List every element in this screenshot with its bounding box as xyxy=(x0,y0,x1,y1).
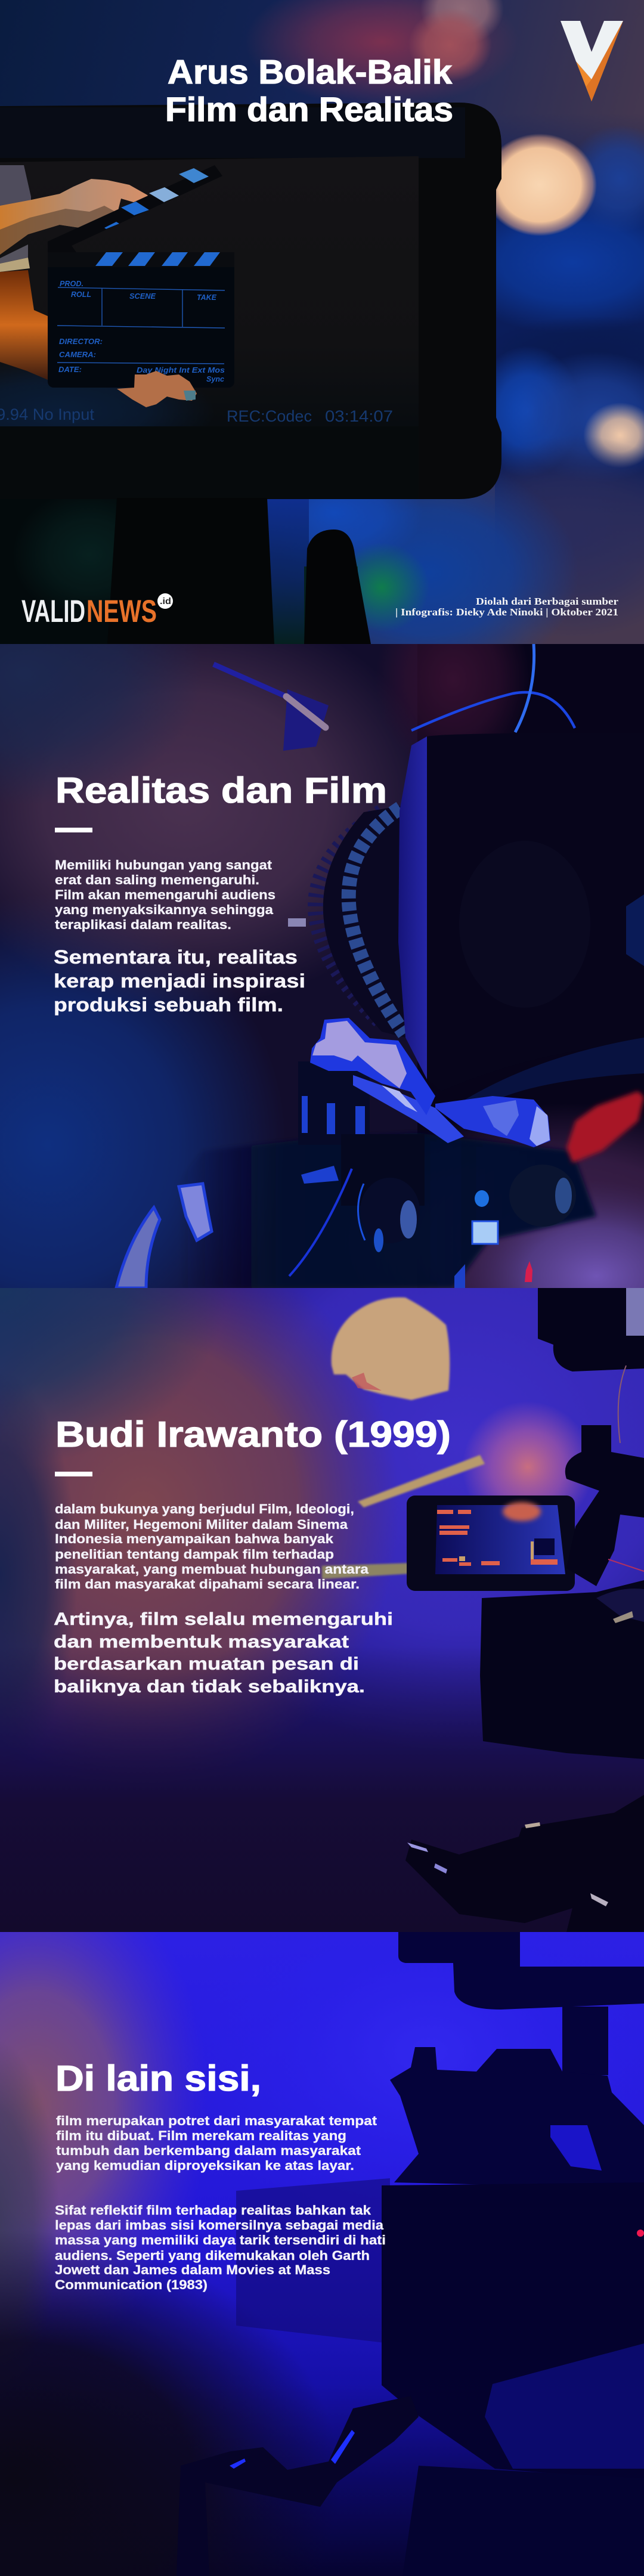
clapper board face: TAKE xyxy=(197,293,216,302)
lens ring xyxy=(288,805,405,1038)
body text: erat dan saling memengaruhi. xyxy=(55,872,259,887)
body text: dalam bukunya yang berjudul Film, Ideologi, xyxy=(55,1501,354,1516)
heading: Budi Irawanto: Budi Irawanto (1999) xyxy=(55,1414,451,1454)
camera monitor frame xyxy=(0,103,501,499)
bright moon bokeh xyxy=(332,1298,450,1400)
emphasis text: kerap menjadi inspirasi xyxy=(54,970,305,992)
body text: second paragraph: Sifat reflektif film terhadap realitas bahkan tak xyxy=(55,2203,371,2218)
camera rails and knobs xyxy=(116,1061,596,1288)
body text: penelitian tentang dampak film terhadap xyxy=(55,1547,334,1562)
lens silhouette xyxy=(236,2178,390,2343)
logo: VALIDNEWS.id: NEWS xyxy=(86,594,157,629)
panel 4 background glow xyxy=(0,1854,644,2576)
emphasis text: baliknya dan tidak sebaliknya. xyxy=(54,1677,365,1696)
monitor readout text xyxy=(0,408,392,423)
fingers under the board xyxy=(117,371,197,407)
body text: first paragraph xyxy=(56,2113,377,2173)
clapper board face: Sync xyxy=(206,374,225,383)
body text: masyarakat, yang membuat hubungan antara xyxy=(55,1562,369,1577)
body text: Memiliki hubungan yang sangat xyxy=(55,857,273,872)
body text: second paragraph: Jowett dan James dalam Movies at Mass xyxy=(55,2262,330,2277)
clapper board face: ROLL xyxy=(71,290,91,299)
monitor readout text: REC:Codec xyxy=(227,407,312,425)
body text: second paragraph xyxy=(55,2203,386,2292)
logo: VALIDNEWS.id: VALID xyxy=(21,594,85,629)
emphasis text: produksi sebuah film. xyxy=(54,994,283,1015)
person arm and torso xyxy=(0,165,152,380)
clapper board face xyxy=(48,252,234,388)
clapper board face: SCENE xyxy=(129,292,156,301)
logo: VALIDNEWS.id: .id xyxy=(160,596,171,606)
body text: first paragraph: film merupakan potret dari masyarakat tempat xyxy=(56,2113,377,2128)
heading underline xyxy=(55,1472,92,1476)
emphasis text: dan membentuk masyarakat xyxy=(54,1632,349,1652)
body text: Film akan memengaruhi audiens xyxy=(55,887,275,902)
emphasis text xyxy=(54,1609,393,1696)
title: Arus Bolak-Balik xyxy=(168,53,452,91)
clapper board face: DATE: xyxy=(58,365,82,374)
icon: Validnews V logo xyxy=(561,21,623,101)
clapper board face: PROD. xyxy=(60,279,83,288)
panel 3 background glow xyxy=(0,1109,644,1932)
rig silhouette xyxy=(405,1795,644,1932)
body text: second paragraph: audiens. Seperti yang dikemukakan oleh Garth xyxy=(55,2248,370,2263)
panel 2 background glow xyxy=(0,644,644,1288)
camera body and lens xyxy=(398,733,644,1103)
body text xyxy=(55,1501,369,1592)
title: Film dan Realitas xyxy=(165,91,453,129)
camera silhouette xyxy=(480,1288,644,1759)
operator hand xyxy=(310,1018,550,1147)
emphasis text: berdasarkan muatan pesan di xyxy=(54,1654,359,1674)
body text: first paragraph: yang kemudian diproyeksikan ke atas layar. xyxy=(56,2158,354,2173)
body text: first paragraph: tumbuh dan berkembang dalam masyarakat xyxy=(56,2143,361,2158)
credits: | Infografis: Dieky Ade Ninoki | Oktober 2021 xyxy=(395,606,618,618)
camera silhouette xyxy=(177,1932,644,2576)
heading: Di lain sisi: Di lain sisi, xyxy=(55,2058,261,2098)
light streaks xyxy=(322,1455,485,1579)
body text: second paragraph: lepas dari imbas sisi komersilnya sebagai media xyxy=(55,2218,384,2233)
body text: second paragraph: massa yang memiliki daya tarik tersendiri di hati xyxy=(55,2233,386,2247)
body text: second paragraph: Communication (1983) xyxy=(55,2277,208,2292)
credits: Diolah dari Berbagai sumber xyxy=(476,596,618,607)
body text xyxy=(55,857,275,932)
body text: dan Militer, Hegemoni Militer dalam Sinema xyxy=(55,1517,348,1532)
panel: Di lain sisi xyxy=(0,1854,644,2576)
title xyxy=(167,58,453,122)
panel: Budi Irawanto xyxy=(0,1109,644,1932)
body text: first paragraph: film itu dibuat. Film merekam realitas yang xyxy=(56,2128,346,2143)
clapper board face: CAMERA: xyxy=(59,350,96,359)
heading underline xyxy=(55,828,92,832)
emphasis text: Artinya, film selalu memengaruhi xyxy=(54,1609,393,1629)
clapper board face: DIRECTOR: xyxy=(59,337,103,346)
heading: Realitas dan Film: Realitas dan Film xyxy=(55,770,387,810)
cover background bokeh xyxy=(0,0,644,686)
panel: cover xyxy=(0,0,644,686)
clapper board face: Day Night Int Ext Mos xyxy=(137,366,225,374)
emphasis text: Sementara itu, realitas xyxy=(54,946,298,968)
body text: Indonesia menyampaikan bahwa banyak xyxy=(55,1531,334,1546)
body text: film dan masyarakat dipahami secara linear. xyxy=(55,1577,360,1592)
monitor readout text: 03:14:07 xyxy=(325,407,393,425)
credits xyxy=(395,596,618,618)
red light xyxy=(566,1091,644,1163)
monitor stand silhouette xyxy=(107,498,371,644)
panel: Realitas dan Film xyxy=(0,644,644,1288)
body text: yang menyaksikannya sehingga xyxy=(55,902,274,917)
camera rig top with strap and cables xyxy=(213,644,575,751)
clapperboard xyxy=(48,165,234,407)
emphasis text xyxy=(54,946,305,1015)
logo: VALIDNEWS.id xyxy=(21,593,173,623)
camera monitor with screen xyxy=(407,1496,575,1591)
body text: teraplikasi dalam realitas. xyxy=(55,917,231,932)
